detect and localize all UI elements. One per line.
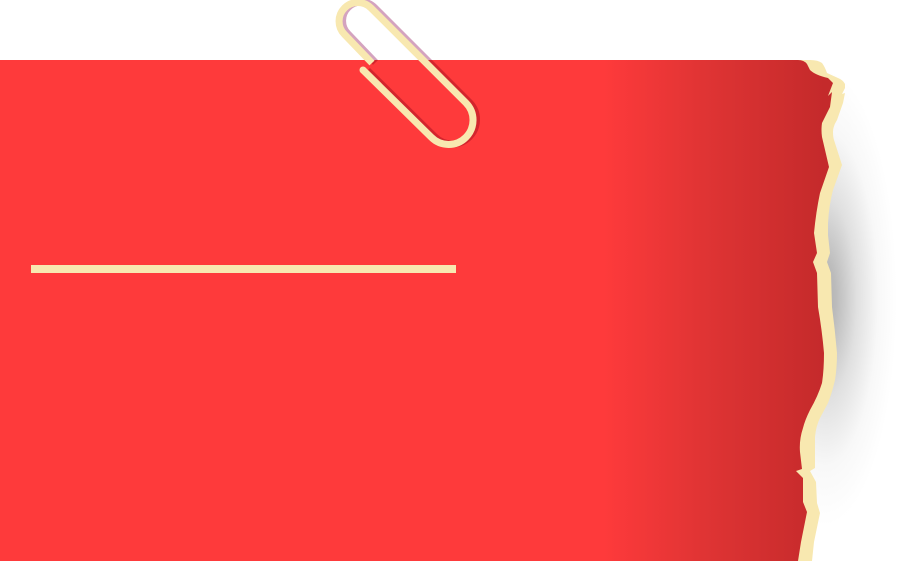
paperclip wire end — [360, 66, 366, 74]
torn cream paper edge — [790, 60, 845, 561]
drop shadow behind torn edge — [753, 70, 897, 526]
paperclip shadow — [343, 2, 477, 144]
icon: paperclip — [339, 2, 477, 144]
divider line — [31, 265, 456, 273]
paperclip wire — [339, 3, 473, 144]
